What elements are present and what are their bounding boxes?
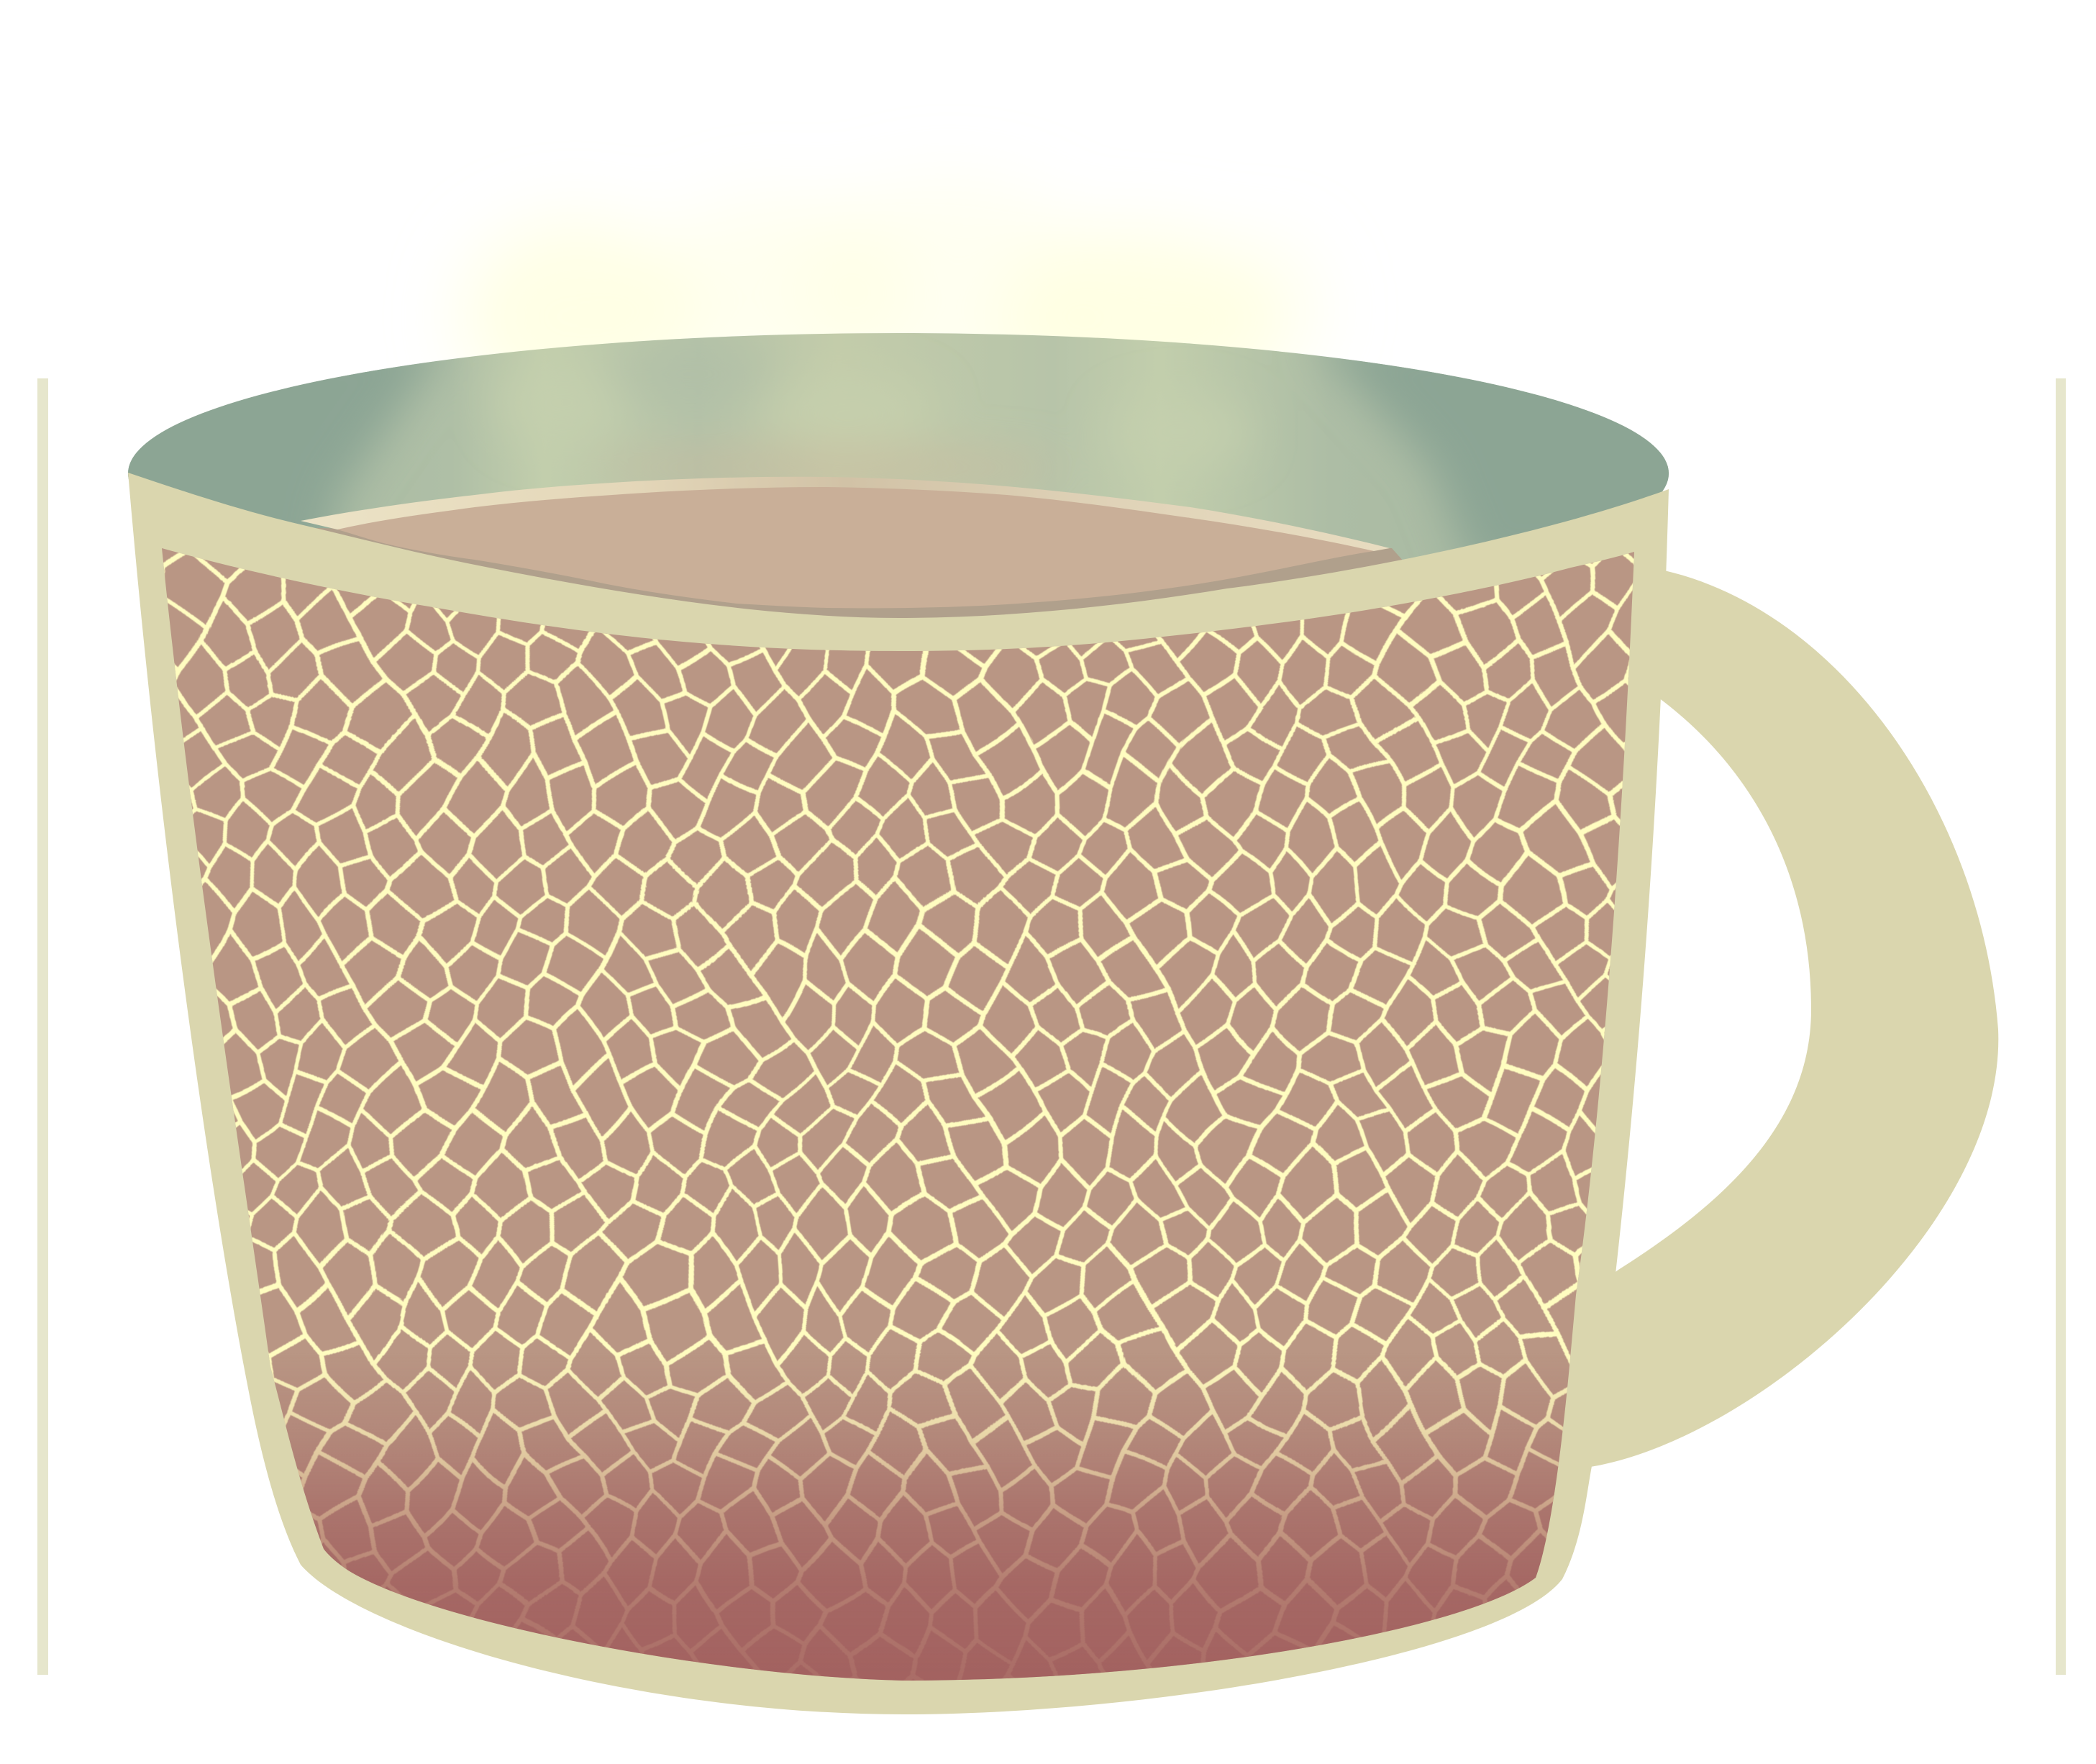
mug inner rim: [128, 333, 1669, 600]
soft mottling on inner wall: [128, 355, 1669, 550]
mug body: [128, 473, 1669, 1714]
liquid top: [337, 487, 1374, 608]
steam glow above the mug: [460, 180, 1323, 417]
mug handle: [1586, 568, 1998, 1468]
panel base colour: [162, 548, 1634, 1681]
liquid surface: [301, 477, 1410, 633]
liquid shadow: [316, 528, 1410, 633]
right side bar: [2056, 378, 2066, 1675]
left side bar: [37, 378, 48, 1675]
dark fade at the base: [272, 1370, 1567, 1681]
cracked glaze panel: [162, 548, 1634, 1681]
crack network: [163, 553, 1634, 1681]
liquid highlight: [301, 477, 1390, 551]
